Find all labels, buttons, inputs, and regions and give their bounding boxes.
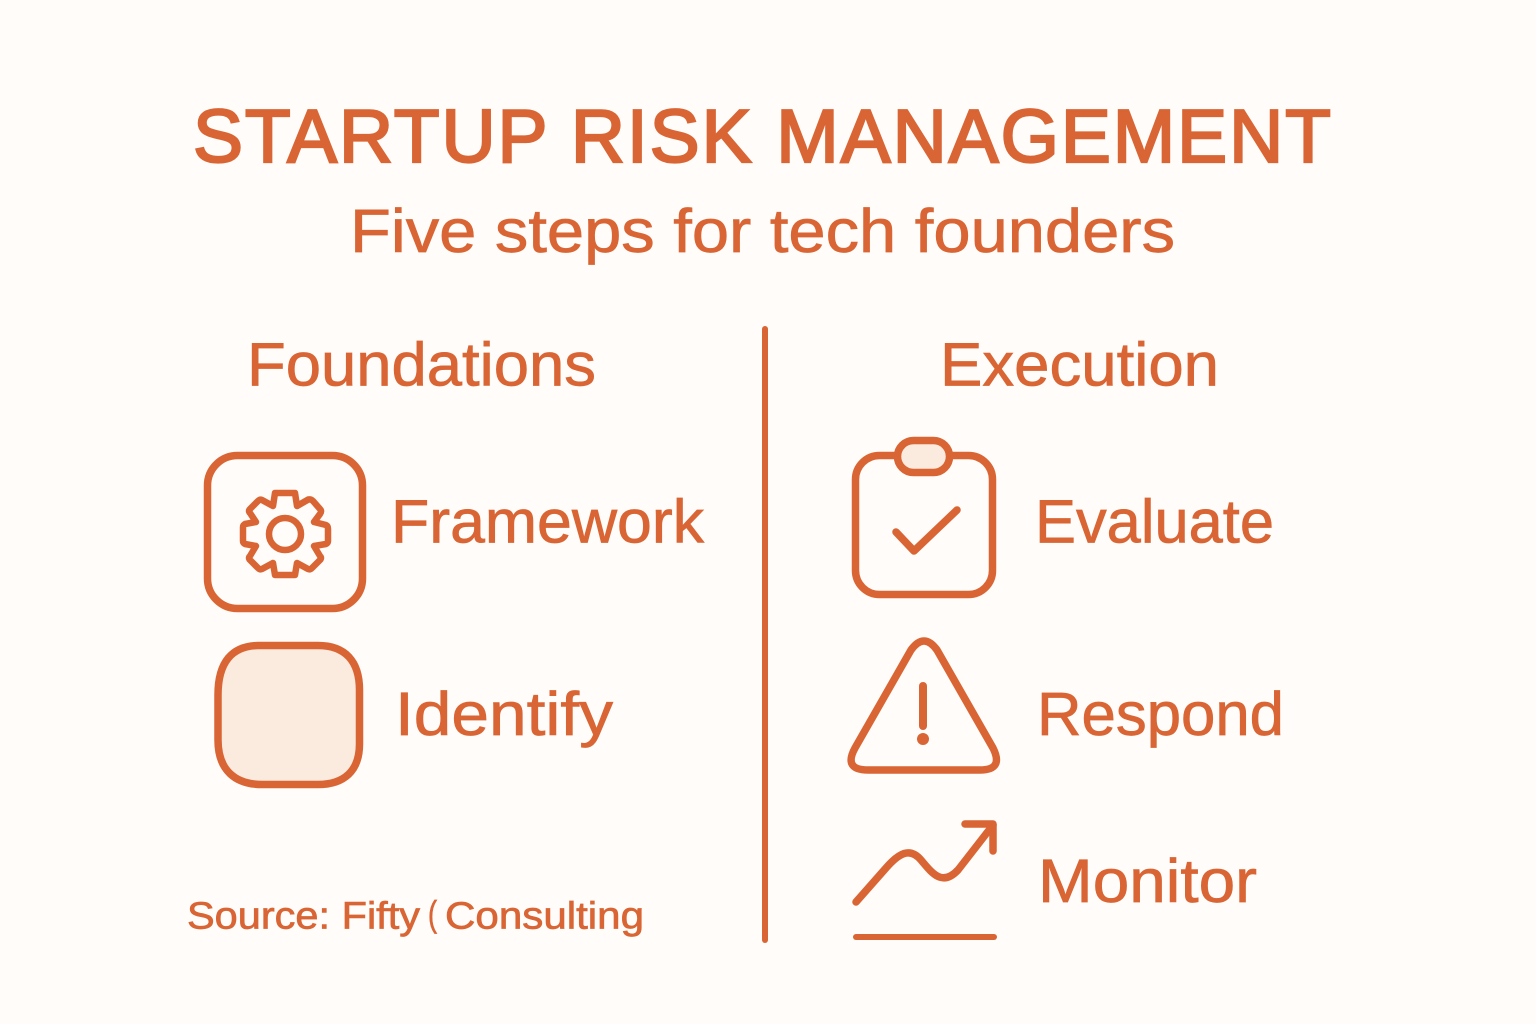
label: framework: Framework xyxy=(391,488,705,556)
heading: execution: Execution xyxy=(940,330,1219,398)
source note xyxy=(187,893,644,938)
panel: foundations xyxy=(187,330,705,938)
icon: monitor trend line xyxy=(856,824,994,937)
label: respond: Respond xyxy=(1037,680,1284,748)
label: evaluate: Evaluate xyxy=(1035,488,1274,556)
label: identify: Identify xyxy=(395,680,614,748)
source note: ( xyxy=(428,893,437,934)
label: monitor: Monitor xyxy=(1038,847,1257,915)
icon: evaluate clipboard xyxy=(856,440,992,594)
icon: identify blank tile xyxy=(218,646,360,784)
icon: framework gear xyxy=(208,456,362,608)
subtitle: Five steps for tech founders xyxy=(350,197,1175,265)
divider between columns xyxy=(762,329,768,940)
icon: respond warning triangle xyxy=(851,641,996,770)
title: STARTUP RISK MANAGEMENT xyxy=(193,94,1331,178)
heading: foundations: Foundations xyxy=(247,330,596,398)
panel: execution xyxy=(851,330,1284,937)
source note: Consulting xyxy=(445,896,644,938)
source note: Source: Fifty xyxy=(187,896,420,938)
